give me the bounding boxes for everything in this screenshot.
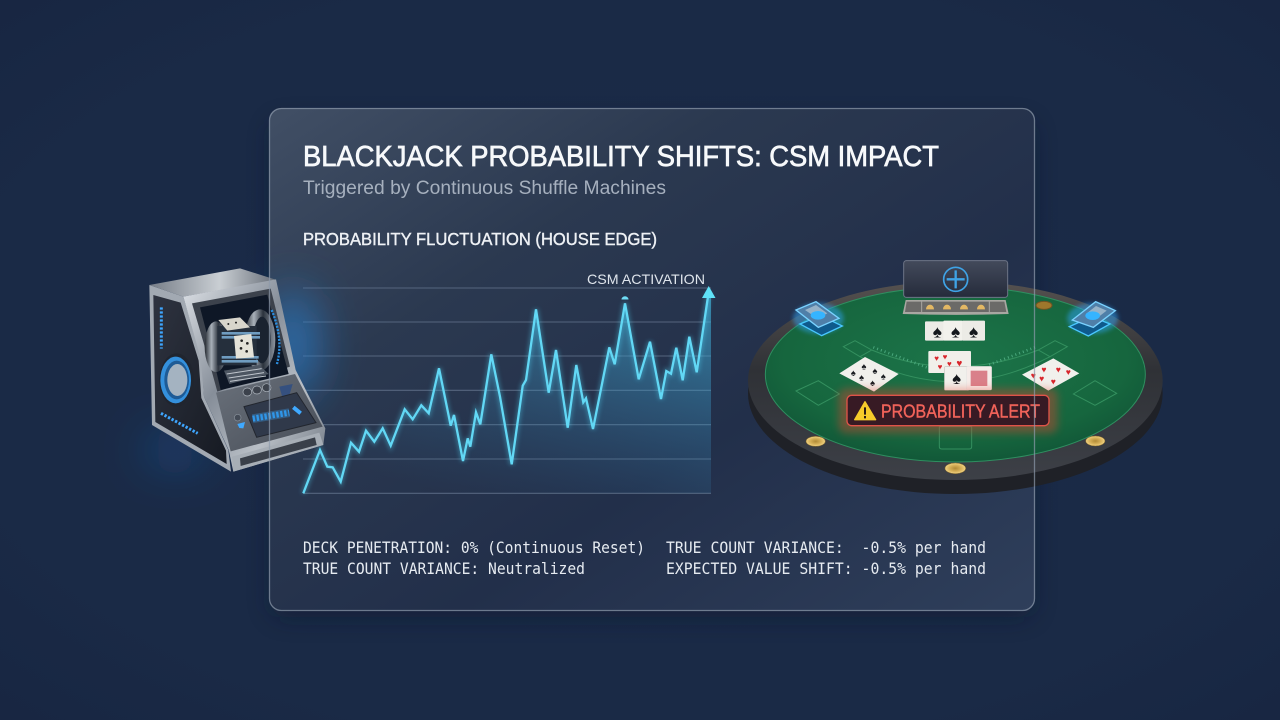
left blue deck <box>793 302 844 336</box>
machine front frame <box>183 279 325 472</box>
center hand: ♠ <box>952 369 961 388</box>
center hand: ♥ <box>956 359 962 370</box>
player hand right: ♥ <box>1039 374 1044 384</box>
subtitle: Triggered by Continuous Shuffle Machines <box>303 178 666 199</box>
chart line <box>303 292 709 493</box>
player hand left: ♠ <box>881 371 886 381</box>
probability alert badge <box>847 395 1049 426</box>
dealer cards: ♠ <box>969 321 978 341</box>
table base <box>748 293 1163 494</box>
player hand right: ♥ <box>1041 365 1047 375</box>
table rim <box>748 281 1163 480</box>
player hand left: ♠ <box>870 378 875 388</box>
chart line glow <box>303 292 709 493</box>
dealer cards: ♠ <box>933 321 942 341</box>
player hand right: ♥ <box>1056 365 1061 375</box>
icon: continuous shuffle machine <box>149 268 325 472</box>
card in drum <box>218 317 250 331</box>
center hand: ♥ <box>938 362 943 371</box>
player hand left: ♠ <box>862 361 867 371</box>
stat: true count variance: TRUE COUNT VARIANCE: -0.5% per hand <box>666 539 986 557</box>
player hand left: ♠ <box>873 366 878 376</box>
stat: deck penetration: DECK PENETRATION: 0% (Continuous Reset) <box>303 539 645 557</box>
dealer cards <box>925 321 985 341</box>
warning icon <box>855 402 876 420</box>
chart heading: PROBABILITY FLUCTUATION (HOUSE EDGE) <box>303 229 657 249</box>
center hand: ♥ <box>943 352 948 361</box>
table felt <box>765 287 1145 462</box>
right blue deck <box>1067 302 1118 336</box>
alert text: PROBABILITY ALERT <box>881 400 1040 421</box>
machine body side <box>149 285 231 472</box>
player hand right: ♥ <box>1031 370 1036 380</box>
player hand left: ♠ <box>859 373 864 383</box>
felt markings <box>796 341 1117 449</box>
center hand: ♥ <box>934 354 939 363</box>
player hand left <box>839 357 899 392</box>
machine window <box>192 289 290 392</box>
panel shadow <box>272 122 1032 617</box>
side led strips <box>161 307 198 433</box>
machine base <box>232 433 323 472</box>
stat: true count neutralized: TRUE COUNT VARIANCE: Neutralized <box>303 560 585 578</box>
player hand right: ♥ <box>1066 367 1071 377</box>
player hand right <box>1022 358 1079 391</box>
machine glow <box>143 290 317 464</box>
center hand <box>928 351 992 390</box>
control buttons <box>243 384 271 396</box>
line chart: house edge <box>303 271 716 493</box>
stats block <box>303 539 986 578</box>
center hand: ♥ <box>947 360 952 369</box>
coin <box>1036 301 1052 309</box>
chart area fill <box>303 292 711 493</box>
arrow head <box>702 286 716 298</box>
control display <box>244 393 316 437</box>
dealer cards: ♠ <box>951 321 960 341</box>
player hand right: ♥ <box>1051 376 1056 386</box>
probability alert glow <box>838 388 1058 433</box>
peak marker <box>622 296 628 300</box>
side speaker <box>159 353 194 407</box>
dealer screen <box>904 261 1008 297</box>
shuffle drum <box>205 309 279 384</box>
chip tray <box>903 300 1009 315</box>
panel border <box>270 108 1034 610</box>
player hand left: ♠ <box>851 368 856 378</box>
blackjack table <box>748 261 1163 494</box>
title: BLACKJACK PROBABILITY SHIFTS: CSM IMPACT <box>303 141 939 173</box>
gold cup holders <box>806 436 1105 474</box>
control panel <box>216 374 323 451</box>
stat: expected value shift: EXPECTED VALUE SHIFT: -0.5% per hand <box>666 560 986 578</box>
csm activation label: CSM ACTIVATION <box>587 271 705 287</box>
machine top <box>149 268 277 297</box>
panel: glass card <box>269 108 1035 611</box>
